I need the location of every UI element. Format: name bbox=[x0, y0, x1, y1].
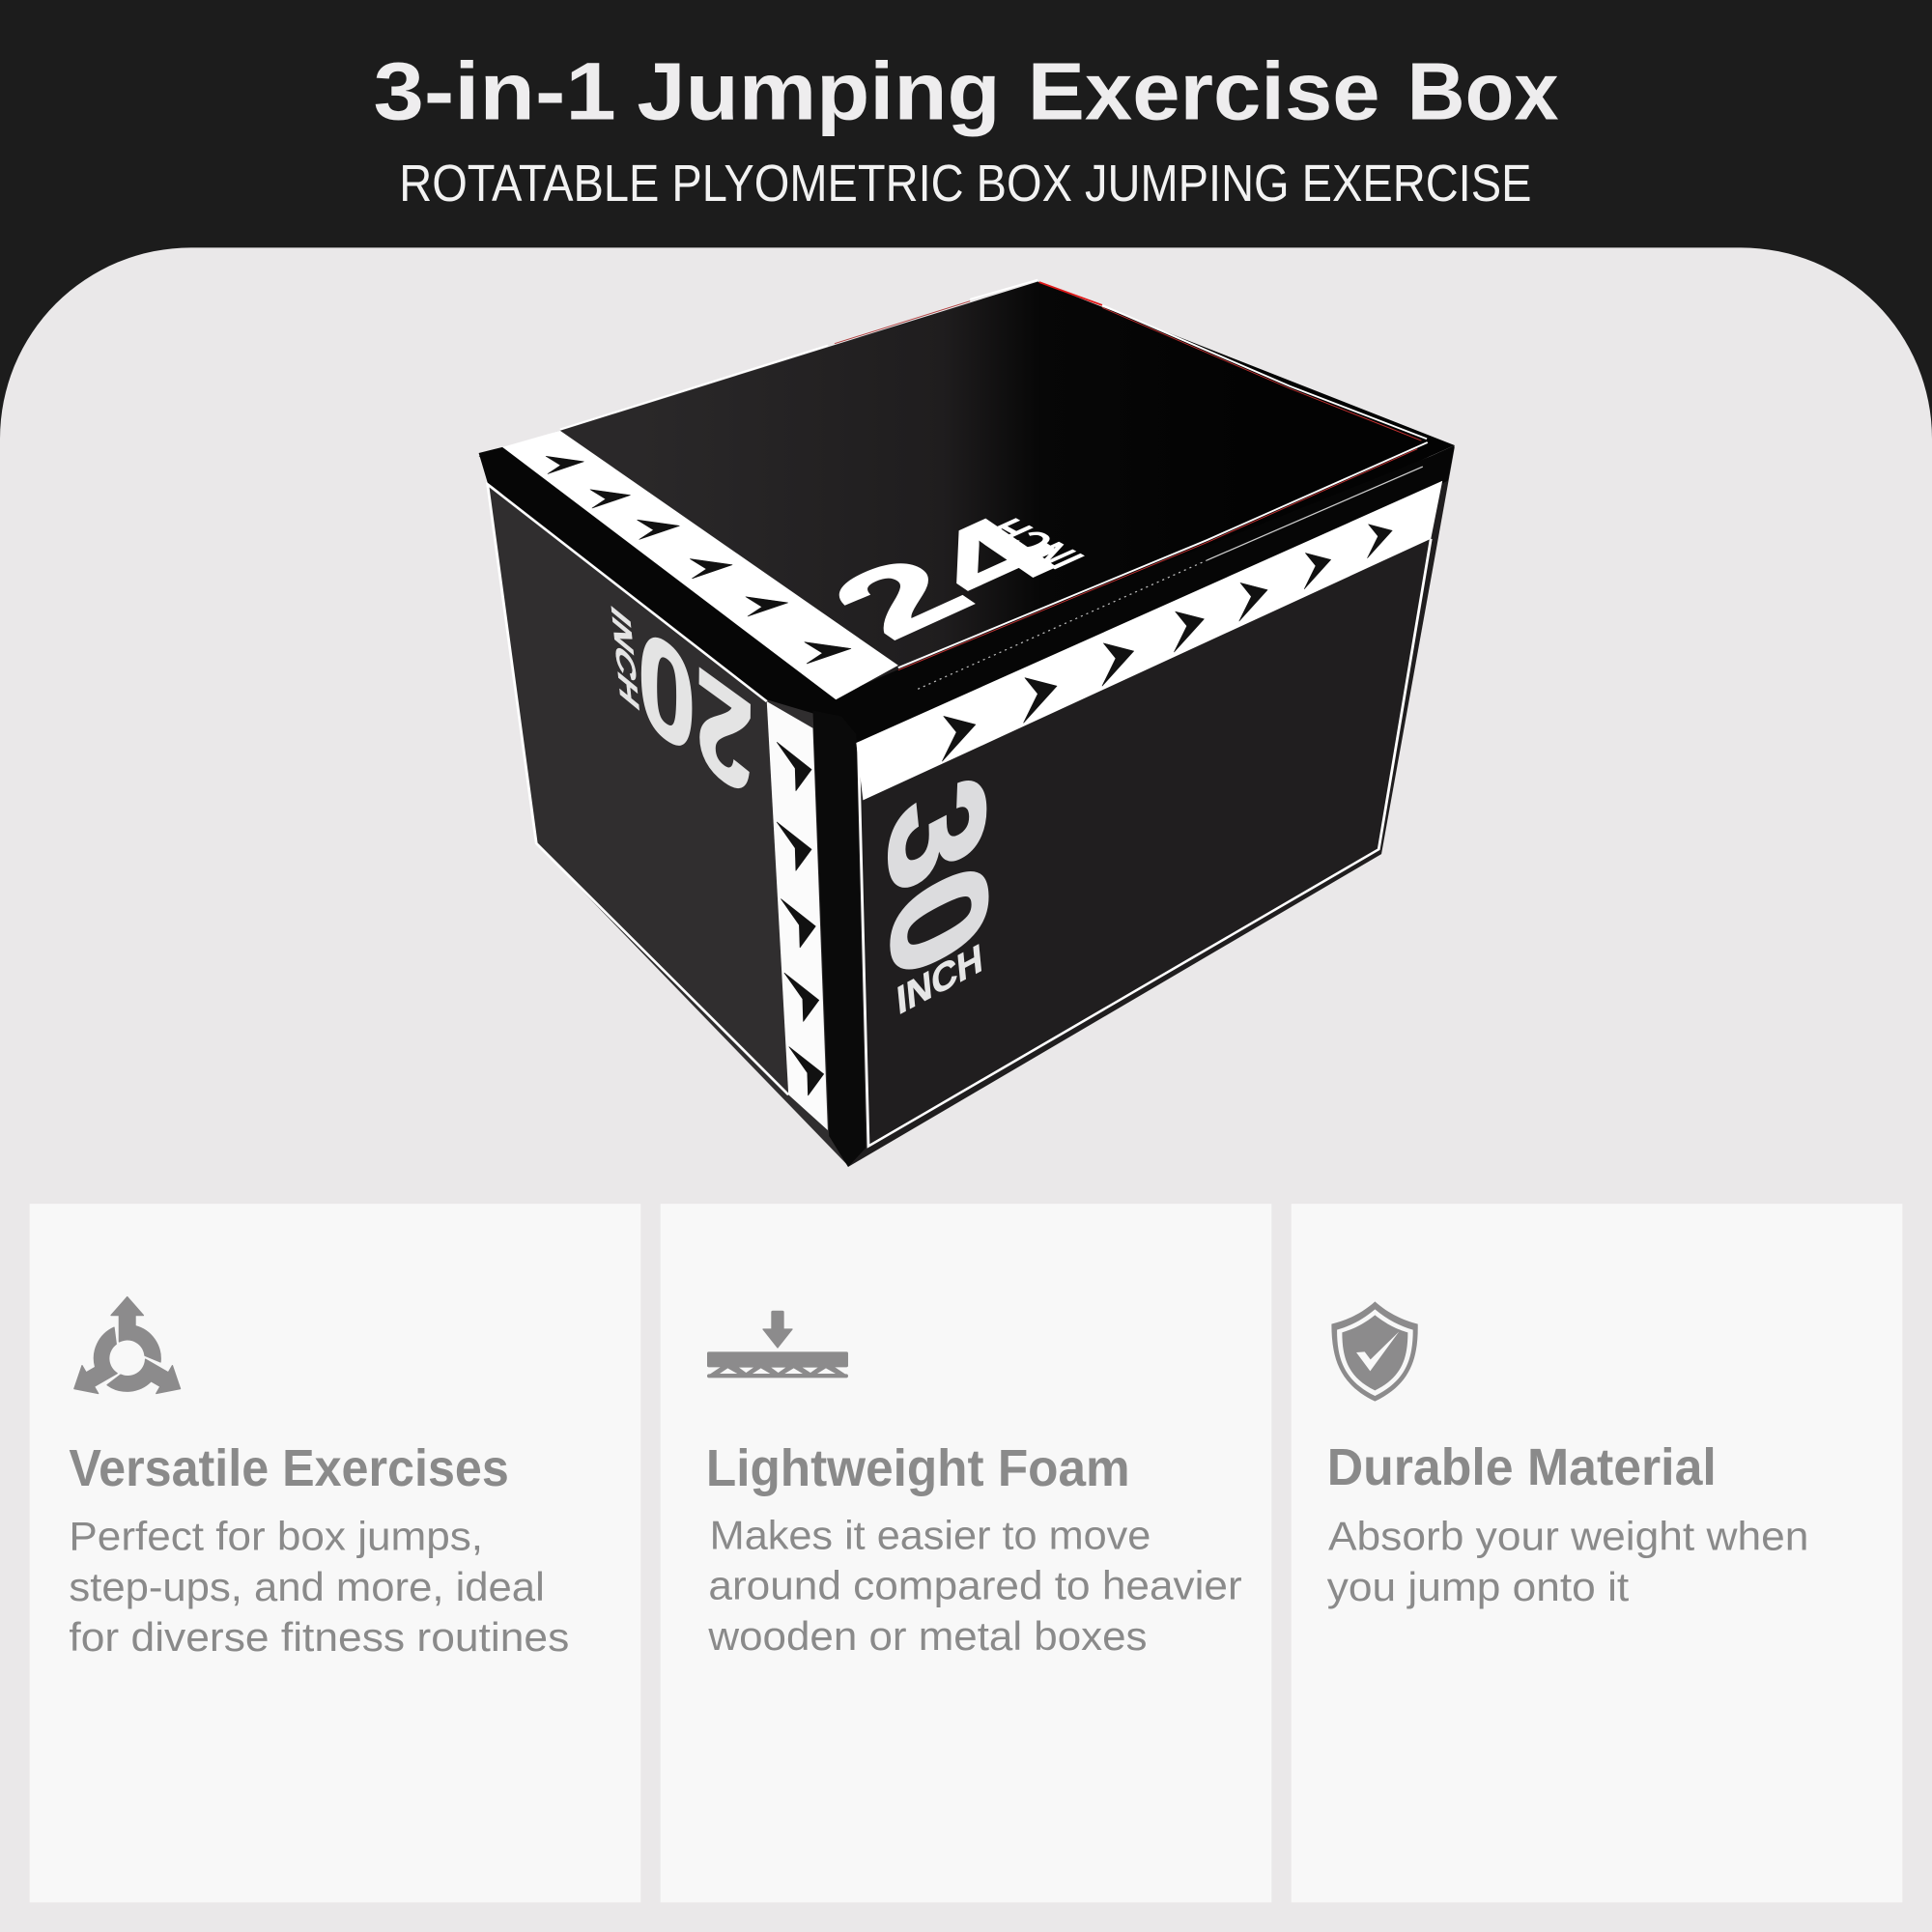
left face frame line bbox=[488, 484, 788, 1094]
right face white strip bbox=[856, 481, 1442, 800]
panel: versatile exercises bbox=[30, 1204, 640, 1902]
20 inch label: INCH bbox=[605, 599, 645, 717]
box right face bbox=[848, 447, 1455, 1167]
icon: shield with check bbox=[1331, 1301, 1418, 1402]
top face edge lines bbox=[560, 280, 1428, 689]
body text bbox=[69, 1514, 569, 1660]
20 label: 20 bbox=[638, 595, 753, 830]
30 label: 30 bbox=[861, 751, 1016, 1004]
body text: step-ups, and more, ideal bbox=[69, 1564, 545, 1609]
24 inch label: INCH bbox=[976, 512, 1096, 575]
header band bbox=[0, 0, 1932, 493]
corner post bbox=[812, 710, 866, 1167]
top face white strip bbox=[502, 431, 898, 699]
title: 3-in-1 bbox=[373, 46, 616, 137]
body text: you jump onto it bbox=[1327, 1564, 1630, 1609]
box top face bbox=[479, 281, 1455, 720]
body text: Perfect for box jumps, bbox=[69, 1514, 483, 1559]
body text: around compared to heavier bbox=[708, 1563, 1242, 1608]
left strip arrows bbox=[777, 742, 824, 1095]
title: Exercise bbox=[1028, 46, 1380, 137]
body text: wooden or metal boxes bbox=[707, 1613, 1147, 1659]
title: Jumping bbox=[637, 46, 1001, 137]
body text: Makes it easier to move bbox=[710, 1512, 1151, 1557]
right strip arrows bbox=[942, 525, 1392, 761]
24 label: 24 bbox=[799, 497, 1093, 657]
heading: Versatile Exercises bbox=[69, 1440, 509, 1497]
left face white strip bbox=[767, 701, 828, 1130]
heading: Lightweight Foam bbox=[706, 1440, 1130, 1497]
panel: lightweight foam bbox=[661, 1204, 1271, 1902]
subtitle: ROTATABLE PLYOMETRIC BOX JUMPING EXERCISE bbox=[399, 156, 1531, 213]
product: plyometric box bbox=[479, 280, 1455, 1167]
body text: for diverse fitness routines bbox=[69, 1614, 569, 1660]
title: Box bbox=[1407, 46, 1559, 137]
top strip arrows bbox=[546, 456, 851, 664]
box left face bbox=[488, 484, 848, 1166]
body text bbox=[707, 1512, 1242, 1659]
body text: Absorb your weight when bbox=[1328, 1514, 1808, 1559]
icon: foam under pressure bbox=[707, 1311, 848, 1378]
title bbox=[373, 46, 1559, 137]
front bevel edges bbox=[479, 445, 1455, 743]
body text bbox=[1327, 1514, 1808, 1609]
right face frame line bbox=[858, 539, 1431, 1147]
30 inch label: INCH bbox=[895, 934, 984, 1023]
icon: three arrows bbox=[58, 1297, 188, 1417]
panel: durable material bbox=[1292, 1204, 1902, 1902]
heading: Durable Material bbox=[1327, 1439, 1717, 1496]
